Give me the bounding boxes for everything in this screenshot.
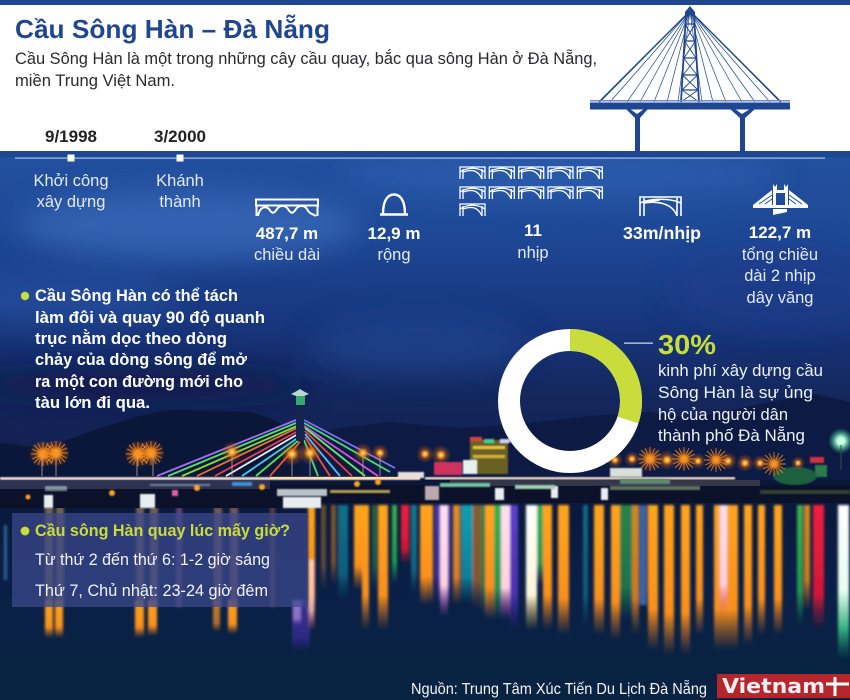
stat: width: 12,9 m xyxy=(368,224,420,243)
donut callout text: hộ của người dân xyxy=(658,406,788,424)
stat: cable-stayed total length: dây văng xyxy=(747,289,813,307)
timeline date: 9/1998: xây dựng xyxy=(37,193,105,211)
callout: how the bridge rotates: tàu lớn đi qua. xyxy=(35,394,150,412)
callout: how the bridge rotates xyxy=(21,287,265,412)
timeline line xyxy=(15,158,825,159)
stat: spans: nhịp xyxy=(517,244,549,262)
stat: span length xyxy=(623,197,701,243)
cable-stayed rainbow cables xyxy=(157,420,395,476)
callout: how the bridge rotates: làm đôi và quay 90 độ quanh xyxy=(35,309,265,327)
stat: cable-stayed total length: tổng chiều xyxy=(742,246,818,264)
stat: spans: 11 xyxy=(524,221,542,240)
callout: how the bridge rotates: chảy của dòng sông để mở xyxy=(35,351,247,369)
callout: how the bridge rotates: ra một con đường mới cho xyxy=(35,373,243,391)
icon: multi-arch bridge xyxy=(256,200,318,216)
callout: how the bridge rotates: trục nằm dọc theo dòng xyxy=(35,329,227,348)
stat: cable-stayed total length: 122,7 m xyxy=(749,223,811,242)
stat: length: chiều dài xyxy=(254,246,320,264)
intro text xyxy=(15,49,597,90)
stat: length: 487,7 m xyxy=(256,224,318,243)
source: Nguồn: Trung Tâm Xúc Tiến Du Lịch Đà Nẵng xyxy=(411,679,707,698)
illuminated riverside scatter xyxy=(26,479,850,500)
far riverbank xyxy=(0,485,850,508)
icon grid: eleven spans xyxy=(460,167,602,216)
panel: when the bridge rotates: Cầu sông Hàn quay lúc mấy giờ? xyxy=(35,522,290,540)
panel: when the bridge rotates: Từ thứ 2 đến thứ 6: 1-2 giờ sáng xyxy=(35,551,270,569)
panel: when the bridge rotates xyxy=(12,513,308,607)
stat: length xyxy=(254,200,320,264)
street lamps xyxy=(29,428,850,476)
main bridge pier blocks xyxy=(44,486,608,508)
donut chart: 30 percent xyxy=(509,340,631,462)
timeline band xyxy=(0,151,850,157)
donut callout text: kinh phí xây dựng cầu xyxy=(658,362,823,380)
top navy bar xyxy=(0,0,850,5)
timeline date: 3/2000: Khánh xyxy=(156,172,204,190)
bridge and city lights on the shoreline xyxy=(0,389,850,508)
stat: width: rộng xyxy=(377,246,411,264)
intro text: miền Trung Việt Nam. xyxy=(15,71,175,90)
title: Cầu Sông Hàn – Đà Nẵng xyxy=(15,14,330,44)
icon: suspension bridge xyxy=(753,184,808,215)
photo background: night sky over the Han river xyxy=(0,151,850,700)
stat: width xyxy=(368,194,420,264)
water xyxy=(0,480,850,700)
white header background xyxy=(0,0,850,151)
intro text: Cầu Sông Hàn là một trong những cây cầu quay, bắc qua sông Hàn ở Đà Nẵng, xyxy=(15,49,597,68)
river reflections xyxy=(4,505,849,660)
panel: when the bridge rotates: Thứ 7, Chủ nhật: 23-24 giờ đêm xyxy=(35,582,268,600)
timeline date: 9/1998: Khởi công xyxy=(33,172,109,190)
stat: spans xyxy=(460,167,602,262)
timeline date: 3/2000: 3/2000 xyxy=(154,127,206,146)
donut callout text: 30% xyxy=(658,329,716,360)
mountains xyxy=(300,394,850,480)
timeline date: 9/1998 xyxy=(33,127,109,211)
callout leader line xyxy=(624,342,653,344)
icon: single arch span xyxy=(640,197,681,216)
callout: how the bridge rotates: Cầu Sông Hàn có thể tách xyxy=(35,287,238,305)
stat: span length: 33m/nhịp xyxy=(623,223,701,243)
timeline date: 9/1998: 9/1998 xyxy=(45,127,97,146)
bridge tower xyxy=(291,389,309,441)
stat: cable-stayed total length xyxy=(742,184,818,307)
icon: arch xyxy=(380,194,408,214)
icon: cable-stayed bridge header illustration xyxy=(590,6,790,151)
timeline date: 3/2000: thành xyxy=(159,193,201,211)
bridge deck xyxy=(0,477,420,480)
timeline date: 3/2000 xyxy=(154,127,206,211)
donut callout text xyxy=(658,329,823,445)
colourful hotel buildings xyxy=(398,437,827,485)
donut callout text: thành phố Đà Nẵng xyxy=(658,426,805,445)
stat: cable-stayed total length: dài 2 nhịp xyxy=(744,267,816,285)
logo: Vietnam+: Vietnam xyxy=(722,674,825,698)
donut callout text: Sông Hàn là sự ủng xyxy=(658,384,813,402)
